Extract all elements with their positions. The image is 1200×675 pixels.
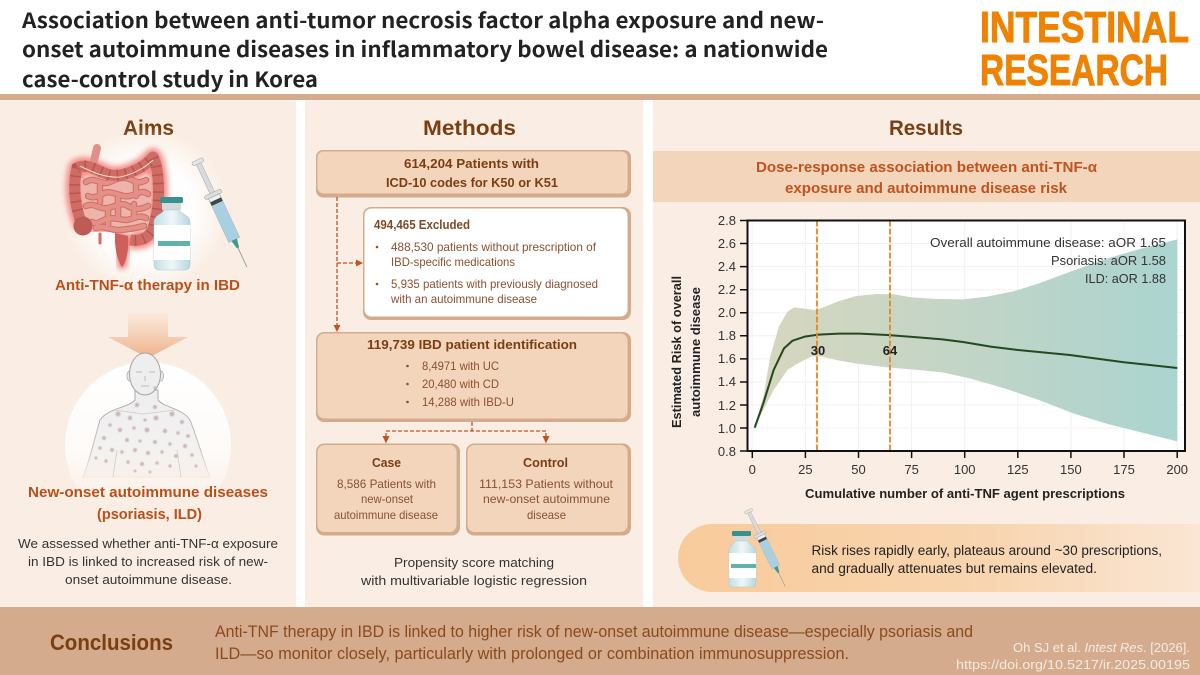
subheading band: exposure and autoimmune disease risk (785, 181, 1068, 197)
x axis tick labels: 100 (954, 462, 976, 477)
label: new-onset autoimmune diseases (28, 484, 268, 523)
x axis tick labels: 200 (1166, 462, 1188, 477)
legend: adjusted odds ratios: Psoriasis: aOR 1.58 (1051, 253, 1166, 268)
text: citation: Oh SJ et al. Intest Res. [2026]. (1013, 640, 1190, 655)
text: aims description (18, 536, 278, 587)
text: statistical method (360, 555, 587, 588)
title: Association between anti-tumor necrosis factor alpha exposure and new- (21, 5, 824, 35)
y axis tick labels: 2.0 (718, 305, 736, 320)
box: IBD patient identification: 8,4971 with UC (422, 359, 499, 373)
text: conclusion statement (215, 622, 973, 663)
box: case: Case (372, 455, 401, 470)
box: control: new-onset autoimmune (483, 492, 610, 506)
reference lines at 30 and 64 (817, 220, 890, 451)
box: all patients (316, 150, 631, 198)
panel: results (653, 100, 1200, 607)
x axis tick labels: 0 (749, 462, 756, 477)
box: all patients: ICD-10 codes for K50 or K51 (386, 175, 558, 190)
callout: key finding: and gradually attenuates but remains elevated. (812, 561, 1097, 576)
y axis title: autoimmune disease (689, 287, 703, 417)
label: anti-TNF therapy: Anti-TNF-α therapy in IBD (55, 277, 240, 294)
y axis tick labels: 2.6 (718, 236, 736, 251)
y axis tick labels: 1.6 (718, 351, 736, 366)
legend: adjusted odds ratios: ILD: aOR 1.88 (1085, 271, 1166, 286)
text: aims description: onset autoimmune disease. (65, 572, 232, 587)
text: aims description: We assessed whether anti-TNF-α exposure (18, 536, 278, 551)
box: excluded: with an autoimmune disease (390, 292, 537, 306)
heading: results: Results (889, 117, 963, 140)
y axis tick labels: 1.2 (718, 398, 736, 413)
box: IBD patient identification: 20,480 with CD (422, 377, 499, 391)
text: key finding: Risk rises rapidly early, plateaus around ~30 prescriptions, (812, 543, 1162, 558)
y axis tick labels: 2.8 (718, 213, 736, 228)
y axis tick labels: 1.0 (718, 421, 736, 436)
box: all patients: 614,204 Patients with (404, 156, 539, 171)
colon (75, 157, 159, 240)
y axis tick labels: 0.8 (718, 444, 736, 459)
heading: conclusions: Conclusions (50, 630, 173, 655)
labels: reference values: 64 (883, 343, 898, 358)
labels: reference values: 30 (811, 343, 825, 358)
arrow: flow to identification and exclusion (334, 197, 363, 332)
panel: conclusions (0, 607, 1200, 675)
text: conclusion statement: Anti-TNF therapy in IBD is linked to higher risk of new-onset autoimmune disease—especially psoriasis and (215, 622, 973, 641)
small intestine loops (86, 178, 148, 230)
y axis tick labels: 2.2 (718, 282, 736, 297)
arrow: therapy to disease (108, 313, 188, 358)
y axis title: Estimated Risk of overall (670, 276, 684, 428)
box: IBD patient identification: 14,288 with IBD-U (422, 395, 514, 409)
labels: reference values (811, 343, 898, 358)
y axis tick labels: 1.8 (718, 328, 736, 343)
text: citation (956, 640, 1190, 672)
x axis tick labels: 75 (904, 462, 919, 477)
box: IBD patient identification (316, 332, 631, 422)
panel: methods (305, 100, 643, 607)
journal logo (980, 3, 1189, 95)
icon: vial (154, 197, 190, 270)
text: statistical method: Propensity score matching (394, 555, 554, 570)
legend: adjusted odds ratios: Overall autoimmune disease: aOR 1.65 (930, 235, 1166, 250)
y axis title (670, 276, 703, 428)
heading: aims: Aims (123, 117, 174, 140)
icon: syringe (189, 156, 255, 271)
box: control: 111,153 Patients without (479, 477, 614, 491)
callout: key finding (678, 507, 1200, 592)
arrow: split to case and control (382, 422, 550, 444)
x axis tick labels: 175 (1113, 462, 1135, 477)
text: citation: https://doi.org/10.5217/ir.2025.00195 (956, 657, 1190, 672)
icon: person with skin lesions (83, 353, 210, 477)
box: control: Control (523, 455, 568, 470)
label: new-onset autoimmune diseases: (psoriasis, ILD) (97, 506, 202, 523)
chart: dose-response curve (670, 213, 1188, 501)
x axis tick labels: 125 (1007, 462, 1029, 477)
icon: inflamed intestine (74, 148, 159, 268)
icon: vial small (729, 531, 756, 587)
text: conclusion statement: ILD—so monitor closely, particularly with prolonged or combination immunosuppression. (215, 644, 849, 663)
x axis tick labels (749, 462, 1188, 477)
box: excluded: 494,465 Excluded (374, 217, 470, 232)
x axis tick labels: 50 (851, 462, 866, 477)
legend: adjusted odds ratios (930, 235, 1166, 286)
box: control: disease (527, 508, 566, 522)
confidence band and estimate line (754, 240, 1178, 442)
box: case: new-onset (361, 492, 414, 506)
panel: aims (0, 100, 296, 607)
box: excluded: 488,530 patients without prescription of (391, 240, 597, 254)
title: case-control study in Korea (22, 64, 318, 94)
box: control (466, 444, 631, 536)
box: excluded (363, 207, 631, 320)
title: onset autoimmune diseases in inflammatory bowel disease: a nationwide (22, 34, 828, 64)
label: new-onset autoimmune diseases: New-onset autoimmune diseases (28, 484, 268, 501)
box: case: autoimmune disease (334, 508, 438, 522)
box: IBD patient identification: 119,739 IBD patient identification (367, 337, 577, 352)
x axis tick labels: 25 (798, 462, 813, 477)
x axis tick labels: 150 (1060, 462, 1082, 477)
header bar (0, 94, 1200, 100)
box: case (316, 444, 460, 536)
icon: white glow behind person (65, 362, 231, 528)
text: aims description: in IBD is linked to increased risk of new- (28, 554, 268, 569)
y axis tick labels (718, 213, 736, 459)
subheading band: Dose-response association between anti-TNF-α (756, 160, 1097, 176)
icon: white glow behind intestine (63, 128, 227, 292)
y axis tick labels: 1.4 (718, 374, 736, 389)
box: excluded: 5,935 patients with previously diagnosed (391, 277, 598, 291)
icon: syringe small (742, 507, 791, 589)
subheading band (653, 151, 1200, 202)
box: case: 8,586 Patients with (337, 477, 436, 491)
x axis title: Cumulative number of anti-TNF agent prescriptions (805, 487, 1125, 501)
title (21, 5, 828, 94)
axes frame (748, 220, 1185, 451)
box: excluded: IBD-specific medications (391, 255, 515, 269)
text: statistical method: with multivariable logistic regression (360, 573, 587, 588)
y axis tick labels: 2.4 (718, 259, 736, 274)
heading: methods: Methods (423, 117, 516, 140)
